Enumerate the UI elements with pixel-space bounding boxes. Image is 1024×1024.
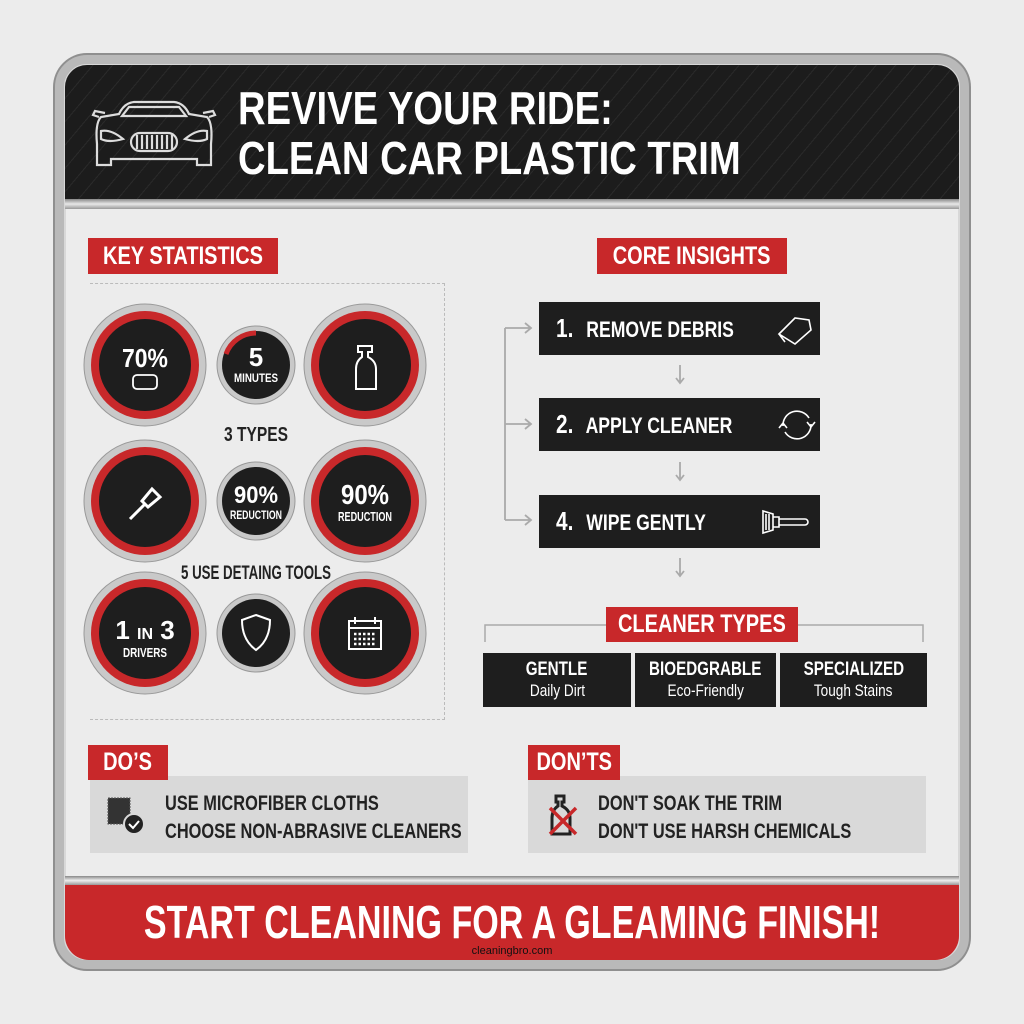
stat: 70%: 70% — [122, 343, 168, 373]
cleaner: gentle: Daily Dirt — [529, 681, 585, 700]
cleaner: specialized: Tough Stains — [814, 681, 893, 700]
stat: shield — [217, 594, 295, 672]
title: CLEAN CAR PLASTIC TRIM — [238, 132, 741, 184]
cleaner: biodegradable: Eco-Friendly — [667, 681, 744, 700]
stat: 90% small: REDUCTION — [230, 508, 282, 522]
stat: 70% — [84, 304, 206, 426]
stat: 90% big: 90% — [341, 479, 389, 510]
cleaner: specialized — [780, 653, 927, 707]
flow connectors — [504, 322, 684, 578]
frame — [55, 55, 969, 969]
stat: 1 in 3: 1 IN 3 — [115, 615, 175, 645]
label: do's — [88, 745, 168, 780]
step 2 — [539, 398, 820, 451]
text: tools: 5 USE DETAING TOOLS — [181, 563, 331, 584]
stat: 90% big — [304, 440, 426, 562]
stat: 5 minutes: 5 — [249, 342, 263, 372]
icon: car — [92, 100, 216, 166]
label: do's: DO’S — [104, 748, 152, 776]
icon: cloth check — [108, 798, 143, 833]
title — [238, 82, 741, 184]
label: key statistics — [88, 238, 278, 274]
stat: brush — [84, 440, 206, 562]
stat: calendar — [304, 572, 426, 694]
panel: key statistics — [90, 283, 445, 720]
cleaner: biodegradable: BIOEDGRABLE — [649, 659, 762, 680]
stat: 1 in 3 — [84, 572, 206, 694]
footer call to action — [65, 885, 959, 960]
label: don'ts — [528, 745, 620, 780]
step 1: 1. REMOVE DEBRIS — [556, 313, 734, 343]
cleaner: gentle — [483, 653, 631, 707]
panel: don'ts: DON'T SOAK THE TRIM — [598, 792, 782, 815]
stat: 5 minutes — [217, 326, 295, 404]
stat: 5 minutes: MINUTES — [234, 371, 278, 385]
title: REVIVE YOUR RIDE: — [238, 82, 613, 134]
stat: 90% small — [217, 462, 295, 540]
text: 3 types: 3 TYPES — [224, 424, 288, 446]
cleaner: biodegradable — [635, 653, 776, 707]
header band — [65, 65, 959, 199]
label: core insights — [597, 238, 787, 274]
stat: 90% big: REDUCTION — [338, 509, 392, 524]
stat: 1 in 3: DRIVERS — [123, 645, 167, 660]
cleaner: specialized: SPECIALIZED — [803, 659, 904, 680]
panel: do's: CHOOSE NON-ABRASIVE CLEANERS — [165, 820, 462, 843]
step 4 — [539, 495, 820, 548]
step 1 — [539, 302, 820, 355]
icon: crossed bottle — [548, 794, 578, 836]
source: cleaningbro.com — [472, 945, 552, 957]
footer call to action: START CLEANING FOR A GLEAMING FINISH! — [144, 896, 880, 948]
label: don'ts: DON’TS — [536, 748, 612, 776]
panel: don'ts — [528, 776, 926, 853]
label: core insights: CORE INSIGHTS — [613, 242, 771, 270]
panel: don'ts: DON'T USE HARSH CHEMICALS — [598, 820, 851, 843]
label: key statistics: KEY STATISTICS — [103, 242, 263, 270]
stat: spray bottle — [304, 304, 426, 426]
step 4: 4. WIPE GENTLY — [556, 506, 706, 536]
cleaner: gentle: GENTLE — [526, 659, 588, 680]
label: cleaner types: CLEANER TYPES — [618, 610, 786, 638]
label: cleaner types — [606, 607, 798, 642]
step 2: 2. APPLY CLEANER — [556, 409, 732, 439]
stat: 90% small: 90% — [234, 482, 278, 509]
panel: do's: USE MICROFIBER CLOTHS — [165, 792, 379, 815]
cleaner types bracket — [484, 624, 924, 642]
panel: do's — [90, 776, 468, 853]
